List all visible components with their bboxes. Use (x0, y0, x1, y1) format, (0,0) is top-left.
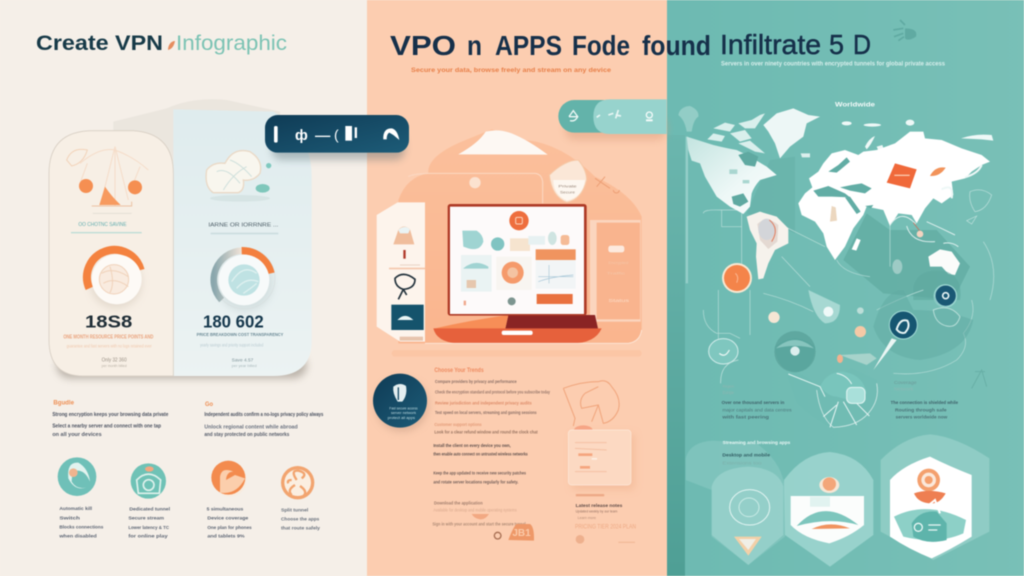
right side panel: Status (608, 298, 630, 303)
text block: right note: servers worldwide now (896, 415, 948, 420)
download button: JB1 (512, 528, 531, 539)
text block: column two: Secure stream (128, 515, 165, 521)
australia (928, 249, 960, 275)
north america (687, 137, 777, 214)
text block: left note (721, 383, 792, 420)
hexagon card: middle (784, 452, 873, 567)
toolbar icons: ( (334, 126, 339, 142)
text block: column four: Choose the apps (281, 516, 320, 522)
white cloud (458, 130, 548, 155)
grey dot (857, 307, 864, 314)
icon: node dot (469, 177, 481, 188)
card left half (49, 131, 173, 376)
text block: left note: major capitals and data centres (722, 407, 792, 412)
text block: column one: when disabled (58, 534, 97, 540)
text block: feature one: on all your devices (52, 432, 102, 438)
title: main headline: APPS (495, 30, 562, 61)
asia pin (913, 223, 923, 237)
panel edge highlight (425, 330, 642, 343)
right side panel: Encrypted (608, 260, 628, 265)
left statistic caption: ONE MONTH RESOURCE PRICE POINTS AND (63, 335, 153, 341)
left statistic caption: Only 32 360 (102, 357, 127, 363)
text block: column three (207, 506, 252, 540)
left statistic: 18S8 (85, 311, 132, 331)
hexagon card: left (686, 441, 785, 565)
shield badge (549, 160, 587, 202)
right gauge (214, 248, 275, 312)
compass faint (972, 370, 987, 388)
text block: column one: Switch (59, 515, 80, 521)
connector outline (408, 173, 543, 203)
text block: centre copy: Customer support options (434, 422, 482, 428)
text block: feature two: Go (205, 401, 213, 408)
panel: map lower network (686, 285, 989, 567)
title: main headline: found (642, 30, 711, 61)
world map: eurasia and africa (798, 120, 993, 275)
darker shading behind america (747, 157, 795, 233)
lens mid (774, 331, 816, 372)
title: main headline (390, 29, 871, 61)
right panel darker side strip (667, 135, 685, 576)
text block: column three: 5 simultaneous (207, 506, 244, 512)
title: main headline: 5 (829, 29, 844, 60)
text block: right note (891, 380, 958, 420)
lens left (709, 339, 738, 383)
text block: centre copy: Test speed on local servers, streaming and gaming sessions (435, 410, 537, 416)
text block: centre copy: Choose Your Trends (434, 368, 484, 374)
text block: feature two: Unlock regional content while abroad (204, 425, 298, 431)
orange map shape (930, 167, 946, 176)
app pills group (558, 99, 667, 140)
southeast asia lines (890, 216, 958, 247)
shield badge: Secure (560, 190, 575, 194)
hexagon caption (722, 440, 791, 466)
text block: column two: for online play (128, 534, 168, 540)
hexagon caption: Streaming and browsing apps (723, 440, 791, 446)
route lines (703, 210, 994, 300)
subtitle: orange: Secure your data, browse freely and stream on any device (411, 67, 611, 74)
right chart illustration (206, 151, 271, 202)
outline shapes (703, 290, 973, 374)
tree silhouette (678, 106, 698, 132)
panel: centre illustration (377, 99, 667, 343)
small branch icon (595, 177, 619, 193)
panel: centre lower (373, 350, 642, 544)
right side panel: Traffic (607, 271, 625, 276)
text block: column one (58, 506, 104, 540)
text block: centre copy: Available for desktop and mobile operating systems (433, 507, 517, 512)
madagascar (852, 238, 861, 251)
shield badge: Private (558, 183, 578, 188)
japan and coast strokes (942, 165, 982, 198)
card back tab (113, 99, 280, 167)
text block: right note: Latest release notes (576, 503, 623, 508)
text block: column one: Automatic kill (59, 506, 93, 512)
text block: right note: The connection is shielded while (891, 400, 958, 405)
orange cloud backdrop (398, 129, 642, 343)
hexagon caption: Desktop and mobile (722, 453, 771, 458)
text block: centre copy: Compare providers by privacy and performance (435, 379, 517, 385)
eurasia and africa landmass (798, 132, 990, 260)
gulf of mexico (732, 193, 748, 207)
right statistic caption: PRICE BREAKDOWN COST TRANSPARENCY (197, 332, 284, 338)
hudson bay (738, 152, 758, 167)
peach dot 3 (837, 354, 843, 363)
south america (747, 212, 788, 279)
right statistic caption: Save 4.57 (232, 357, 254, 363)
text block: feature one: Strong encryption keeps your browsing data private (52, 412, 168, 418)
panel: right background (667, 0, 1024, 576)
text block: feature one: Bgudle (53, 400, 74, 407)
navy badge: server network (391, 411, 416, 415)
text block: centre copy: Look for a clear refund window and round the clock chat (434, 429, 538, 435)
decorative plant near title (893, 20, 916, 41)
panel: comparison card (49, 99, 409, 378)
navy badge: protect all apps (388, 416, 415, 420)
text block: left note: Over one thousand servers in (722, 400, 784, 405)
right statistic: 180 602 (203, 311, 264, 331)
text block: right note: PRICING TIER 2024 PLAN (575, 524, 636, 530)
text block: right note: Learn more (578, 516, 596, 520)
text block: centre copy: Sign in with your account and start the secure tunnel (432, 521, 526, 526)
hexagon caption: Extensions too (722, 461, 762, 466)
navy pin large (873, 311, 917, 370)
text block: feature one: Select a nearby server and connect with one tap (52, 424, 162, 430)
download button (472, 514, 534, 541)
laptop (433, 204, 602, 343)
text block: centre copy: Install the client on every device you own, (433, 443, 511, 449)
navy toolbar pill (265, 115, 409, 153)
text block: column one: Blocks connections (59, 525, 104, 531)
title: main headline: D (853, 29, 871, 60)
text block: right note: Coverage (894, 380, 917, 385)
navy pin bowl (873, 290, 973, 360)
subtitle: white: Servers in over ninety countries with encrypted tunnels for global private access (721, 62, 946, 68)
text block: feature one (52, 400, 168, 438)
text block: centre copy: Check the encryption standard and protocol before you subscribe today (435, 390, 550, 396)
peach dot 2 (855, 326, 866, 337)
right divider line (211, 233, 278, 234)
text block: column four (281, 507, 320, 532)
title: main headline: Infiltrate (720, 29, 821, 60)
left gauge (87, 250, 142, 309)
left plan label: OO CHOTNC SAVINE (78, 222, 127, 228)
text block: column three: Device coverage (207, 515, 249, 521)
grey dot (892, 259, 902, 274)
left statistic caption: guarantee and fast servers with no logs retained ever (67, 343, 152, 348)
text block: centre copy: and rotate server locations regularly for safety. (433, 479, 519, 485)
canadian islands (707, 113, 765, 153)
text block: centre copy: then enable auto connect on untrusted wireless networks (433, 452, 528, 458)
text block: column two: Dedicated tunnel (129, 506, 171, 512)
text block: column two (128, 506, 171, 540)
title: main headline: Fode (572, 30, 630, 61)
text block: right note: Network (894, 387, 914, 392)
text block: centre copy: Download the application (434, 501, 483, 507)
right statistic caption: per year billed (232, 364, 257, 368)
title: main headline: n (467, 30, 482, 61)
text block: centre copy: Review jurisdiction and independent privacy audits (435, 400, 532, 406)
title: left: Infographic (176, 32, 287, 55)
text block: feature two: and stay protected on public networks (204, 432, 289, 438)
navy pin top (913, 271, 961, 307)
text block: right note (575, 503, 636, 544)
lens icon (823, 307, 833, 317)
title: left (36, 32, 287, 55)
title: left: Create VPN (36, 32, 163, 55)
title: main headline: VPO (390, 30, 456, 61)
orange pin (722, 263, 752, 293)
africa pin (830, 206, 837, 222)
text block: column three: and tablets 9% (207, 534, 245, 540)
text block: feature two: Independent audits confirm a no-logs privacy policy always (204, 412, 323, 418)
text block: centre copy: Keep the app updated to receive new security patches (433, 471, 526, 477)
hand illustration (563, 381, 619, 426)
text block: column four: that route safely (281, 526, 320, 532)
map shading and route lines (678, 102, 994, 300)
icon: orange bird (211, 461, 247, 497)
panel: left lower text and icons (52, 400, 323, 540)
text block: left note: Europe (723, 390, 734, 395)
text block: feature two (204, 401, 323, 438)
right statistic caption (197, 332, 284, 368)
greenland (763, 108, 820, 158)
icon: teal bird (58, 457, 96, 496)
small island (801, 153, 810, 157)
right side panel (590, 220, 641, 322)
text block: right note: Routing through safe (895, 407, 947, 412)
south america marker (757, 219, 778, 249)
hexagon card: right (881, 434, 989, 560)
navy badge: Fast secure access (389, 406, 418, 410)
peach dots (768, 312, 780, 323)
map pins (722, 263, 961, 307)
icon: orange flower (281, 466, 314, 499)
inland marks (729, 169, 749, 183)
left divider line (71, 232, 142, 233)
teal glass lens (808, 290, 840, 323)
toolbar icons (274, 126, 399, 144)
caption above map: Worldwide (835, 102, 875, 109)
darker shading south of asia (843, 213, 970, 300)
backdrop bottom shadow (392, 350, 642, 357)
world map: americas (687, 108, 820, 279)
top navy pin lower (933, 308, 960, 326)
text block: column two: Lower latency & TC (128, 525, 169, 531)
side highlight (686, 137, 688, 283)
orange map marker (887, 163, 917, 188)
panel: left background (0, 0, 367, 576)
toolbar icons: ф (295, 128, 308, 144)
laptop screen content (461, 211, 576, 305)
text block: left note: with fast peering (721, 415, 769, 420)
right plan label: IARNE OR IORRNRE ... (208, 223, 279, 229)
caption islands (842, 120, 993, 151)
form card (568, 425, 635, 490)
globe lens (787, 353, 877, 428)
left chart illustration (67, 147, 148, 213)
inland seas (813, 157, 873, 214)
card shadow (57, 353, 307, 378)
text block: column four: Split tunnel (281, 507, 309, 513)
left statistic caption: per month billed (102, 364, 127, 368)
icon: teal device (131, 463, 166, 499)
left side panel (377, 202, 425, 342)
card right half (173, 109, 312, 376)
panel: centre background (367, 0, 668, 576)
text block: column three: One plan for phones (207, 525, 252, 531)
text block: left note: Region (723, 383, 734, 388)
navy badge (373, 374, 428, 432)
form caption (576, 494, 604, 496)
left statistic caption (63, 335, 153, 368)
right statistic caption: yearly savings and priority support included (200, 342, 264, 347)
leaf outlines (967, 190, 992, 224)
navy toolbar pill shadow (272, 133, 405, 160)
navy pin small (935, 285, 956, 306)
text block: right note: Updated weekly by our team (576, 510, 617, 514)
text block: centre copy (432, 368, 550, 526)
